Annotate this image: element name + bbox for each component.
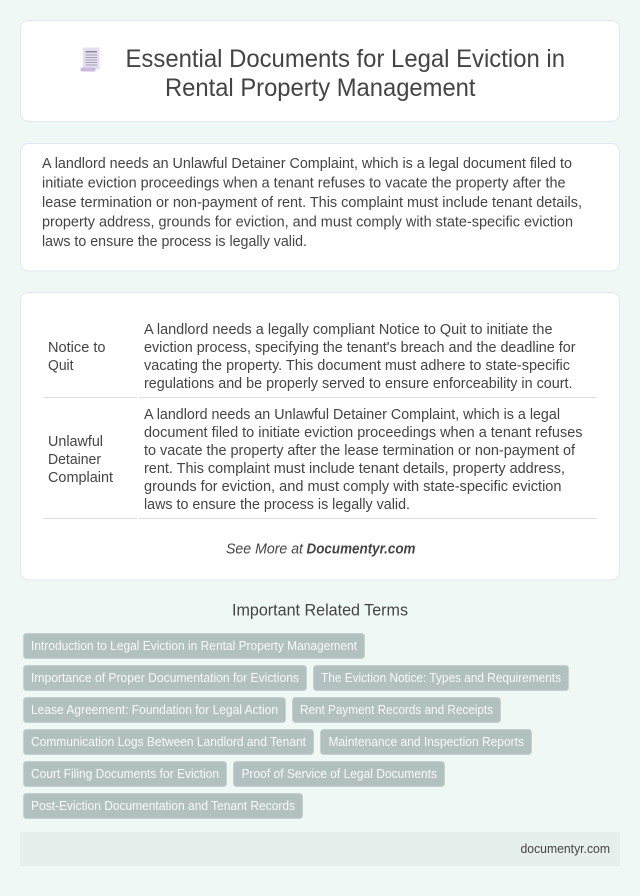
link: see more: See More at [226, 542, 304, 558]
row description: Notice to Quit: vacating the property. This document must adhere to state-specific [144, 358, 570, 374]
tag list: related terms [24, 634, 568, 818]
row description: Unlawful Detainer Complaint [144, 407, 582, 513]
tag: Court Filing Documents for Eviction [31, 767, 219, 781]
row description: Unlawful Detainer Complaint: to vacate the property after the lease termination or non-payment of [144, 443, 576, 459]
text block: summary: A landlord needs an Unlawful Detainer Complaint, which is a legal document filed to [42, 156, 572, 172]
row description: Unlawful Detainer Complaint: rent. This complaint must include tenant details, property address, [144, 461, 565, 477]
panel: summary paragraph [20, 144, 620, 271]
tag [320, 730, 532, 754]
title [126, 45, 565, 102]
text block: summary: lease termination or non-payment of rent. This complaint must include tenant details, [42, 195, 582, 211]
row label: Notice to Quit: Notice to [48, 340, 106, 356]
row description: Notice to Quit: A landlord needs a legally compliant Notice to Quit to initiate the [144, 322, 552, 338]
tag [24, 634, 364, 658]
table row: Notice to Quit [48, 322, 576, 392]
tag: Rent Payment Records and Receipts [300, 703, 493, 717]
tag: Introduction to Legal Eviction in Rental Property Management [31, 639, 357, 653]
tag [234, 762, 444, 786]
row description: Unlawful Detainer Complaint: A landlord needs an Unlawful Detainer Complaint, which is a legal [144, 407, 560, 423]
row description: Unlawful Detainer Complaint: document filed to initiate eviction proceedings when a tenant refuses [144, 425, 582, 441]
text block: summary: laws to ensure the process is legally valid. [42, 234, 307, 250]
row label: Unlawful Detainer Complaint: Complaint [48, 470, 113, 486]
tag: Importance of Proper Documentation for Evictions [31, 671, 299, 685]
title: Essential Documents for Legal Eviction in [126, 45, 565, 73]
tag [24, 730, 314, 754]
row label: Unlawful Detainer Complaint: Detainer [48, 452, 101, 468]
text block: summary: initiate eviction proceedings when a tenant refuses to vacate the property after the [42, 176, 566, 192]
link: see more: Documentyr.com [306, 542, 416, 558]
row label: Notice to Quit [48, 340, 106, 374]
heading: related terms: Important Related Terms [232, 602, 408, 620]
tag: Post-Eviction Documentation and Tenant Records [31, 799, 295, 813]
row description: Unlawful Detainer Complaint: grounds for eviction, and must comply with state-specific eviction [144, 479, 562, 495]
footer: documentyr.com [520, 842, 610, 856]
text block: summary: property address, grounds for eviction, and must comply with state-specific eviction [42, 214, 573, 230]
link: see more [226, 542, 416, 558]
tag [24, 666, 306, 690]
tag: The Eviction Notice: Types and Requirements [321, 671, 561, 685]
panel: documents table [20, 292, 620, 580]
row label: Notice to Quit: Quit [48, 358, 74, 374]
row description: Notice to Quit [144, 322, 576, 392]
tag [314, 666, 568, 690]
tag: Communication Logs Between Landlord and Tenant [31, 735, 306, 749]
tag [24, 698, 286, 722]
row description: Notice to Quit: eviction process, specifying the tenant's breach and the deadline for [144, 340, 576, 356]
title: Rental Property Management [165, 74, 476, 102]
table row: Unlawful Detainer Complaint [48, 407, 582, 513]
tag [24, 762, 226, 786]
tag [24, 794, 302, 818]
row description: Unlawful Detainer Complaint: laws to ensure the process is legally valid. [144, 497, 410, 513]
tag: Maintenance and Inspection Reports [328, 735, 524, 749]
tag [292, 698, 500, 722]
row description: Notice to Quit: regulations and be properly served to ensure enforceability in court. [144, 376, 572, 392]
row label: Unlawful Detainer Complaint: Unlawful [48, 434, 103, 450]
panel: title header [20, 20, 620, 122]
row label: Unlawful Detainer Complaint [48, 434, 113, 486]
icon: document scroll [80, 48, 100, 72]
footer [20, 832, 620, 866]
text block: summary [42, 156, 582, 250]
tag: Lease Agreement: Foundation for Legal Action [31, 703, 278, 717]
tag: Proof of Service of Legal Documents [242, 767, 437, 781]
